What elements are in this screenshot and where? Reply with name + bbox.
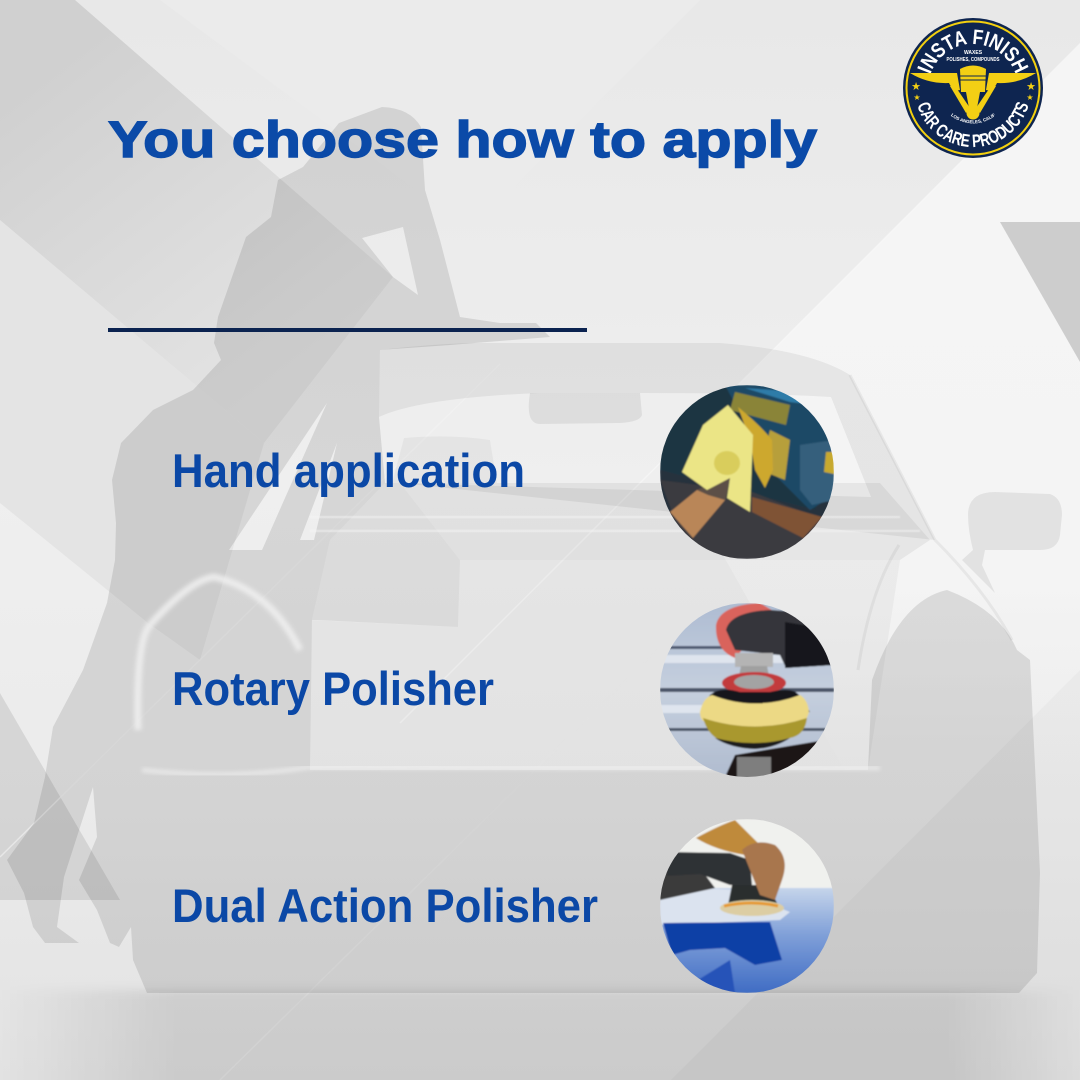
logo badge: POLISHES, COMPOUNDS	[946, 57, 1000, 63]
logo stars: ★	[911, 80, 921, 93]
hood left shadow	[312, 483, 460, 627]
item: dual action polisher	[172, 819, 834, 993]
woman, left car side and bumper	[7, 107, 1040, 993]
logo stars	[911, 80, 1036, 102]
logo stars: ★	[913, 93, 921, 102]
label: dual action polisher: Dual Action Polisher	[172, 879, 598, 932]
logo badge	[903, 18, 1043, 158]
title: You choose how to apply	[108, 111, 818, 168]
hood	[310, 560, 900, 770]
dashboard band	[400, 483, 930, 560]
logo stars: ★	[1026, 93, 1034, 102]
seat headrest	[392, 436, 497, 483]
logo sub text: WAXES	[964, 50, 983, 56]
item: rotary polisher	[172, 603, 834, 779]
left fender highlight	[138, 577, 300, 730]
item: hand application	[172, 385, 834, 559]
label: rotary polisher: Rotary Polisher	[172, 662, 494, 715]
side mirror	[962, 492, 1062, 593]
logo location text: LOS ANGELES, CALIF	[950, 113, 994, 124]
dashboard highlights	[310, 517, 920, 531]
label: hand application: Hand application	[172, 444, 525, 497]
photo: rotary polisher with yellow pad	[660, 603, 834, 779]
car roof	[379, 343, 935, 540]
rear-view mirror	[529, 393, 642, 424]
photo: dual action polisher on blue car	[660, 819, 834, 993]
divider line	[108, 328, 587, 332]
logo top text: INSTA FINISH	[917, 30, 1028, 73]
right fender lines	[850, 375, 1012, 670]
logo bottom text: CAR CARE PRODUCTS	[918, 102, 1028, 148]
bumper highlight	[142, 767, 880, 774]
logo stars: ★	[1026, 80, 1036, 93]
photo: hand with yellow cloth	[660, 385, 834, 559]
logo wings and piston	[910, 66, 1036, 120]
